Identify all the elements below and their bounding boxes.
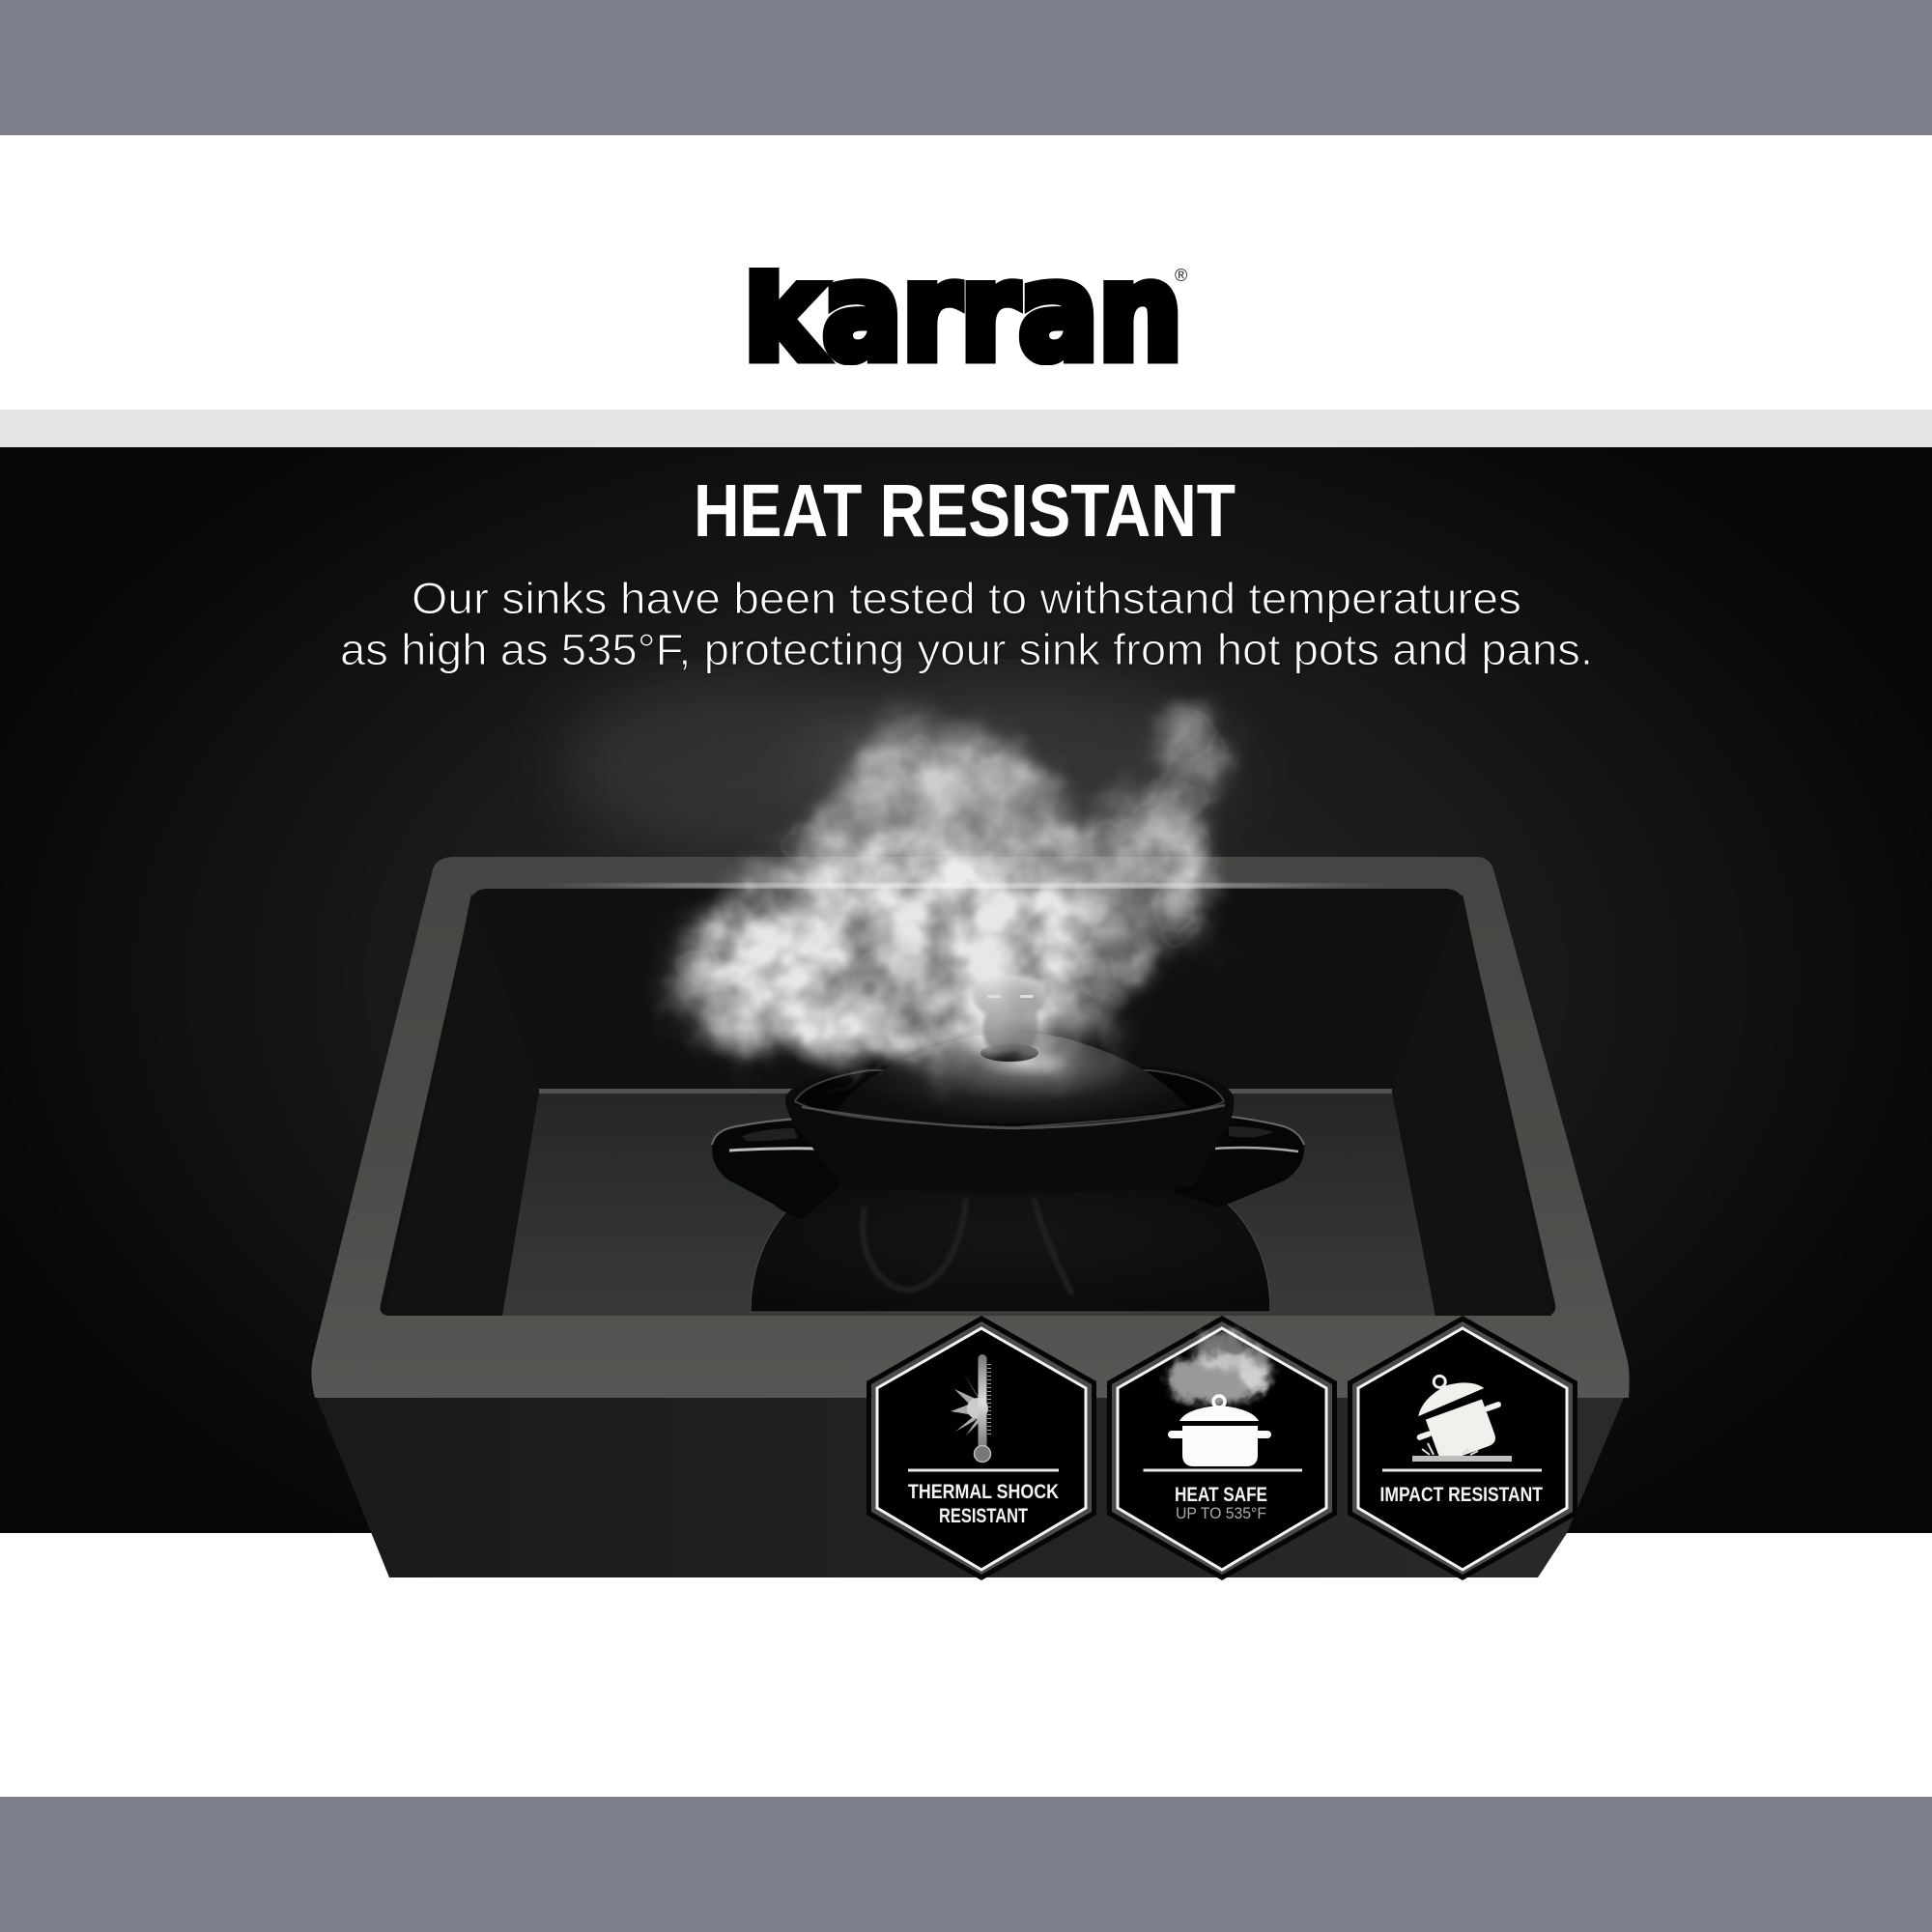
sink right wall [1392,894,1551,1316]
divider [1382,1468,1542,1472]
impact base [1412,1456,1512,1462]
pot rim interior [795,1070,1224,1127]
icon: thermometer with sun [951,1354,991,1463]
heading: HEAT RESISTANT [694,469,1236,553]
sink [311,857,1630,1577]
back rim highlight [541,883,1391,888]
sink front apron [314,1391,1627,1577]
left handle [712,1121,855,1219]
rim front highlight [802,1105,1225,1128]
floor back edge highlight [539,1089,1392,1094]
steam wisps [676,710,1225,1092]
dark hero background [0,447,1932,1533]
bottom gray band [0,1797,1932,1932]
pot collar [785,1065,1234,1193]
background haze behind steam [560,676,1236,850]
icon: steam [1165,1331,1272,1405]
logo: karran: karran [744,235,1182,390]
sink floor [502,1092,1435,1316]
glass knob [974,975,1047,1051]
top gray band [0,0,1932,135]
sink back wall [380,889,1555,1316]
badge: impact resistant [1348,1316,1577,1580]
right handle [1174,1117,1304,1208]
description text [340,574,1593,674]
impact marks [1422,1443,1478,1455]
light gray stripe [0,410,1932,447]
badge: thermal shock resistant [867,1316,1096,1580]
logo: karran [749,268,1187,365]
label: THERMAL SHOCK [908,1481,1059,1503]
lid knob base [980,1044,1038,1062]
label [908,1481,1059,1527]
body reflections [863,1198,1072,1294]
sink left wall [386,894,539,1316]
steam [681,710,1217,1066]
icon: tilted pot [1400,1359,1513,1468]
lid [835,1033,1188,1123]
badge: heat safe: UP TO 535°F [1176,1504,1266,1522]
label: IMPACT RESISTANT [1379,1484,1543,1506]
white logo area [0,135,1932,410]
pot body [751,1183,1270,1312]
divider [1144,1468,1302,1472]
sink rim [311,857,1630,1398]
label: HEAT SAFE [1175,1484,1267,1506]
logo: karran: ® [1175,266,1187,285]
description text: as high as 535°F, protecting your sink from hot pots and pans. [340,625,1593,674]
divider [908,1468,1059,1472]
label: RESISTANT [939,1505,1028,1527]
description text: Our sinks have been tested to withstand temperatures [412,574,1521,623]
pot [712,1033,1304,1312]
badge: heat safe [1107,1316,1337,1580]
icon: pot [1168,1396,1271,1466]
